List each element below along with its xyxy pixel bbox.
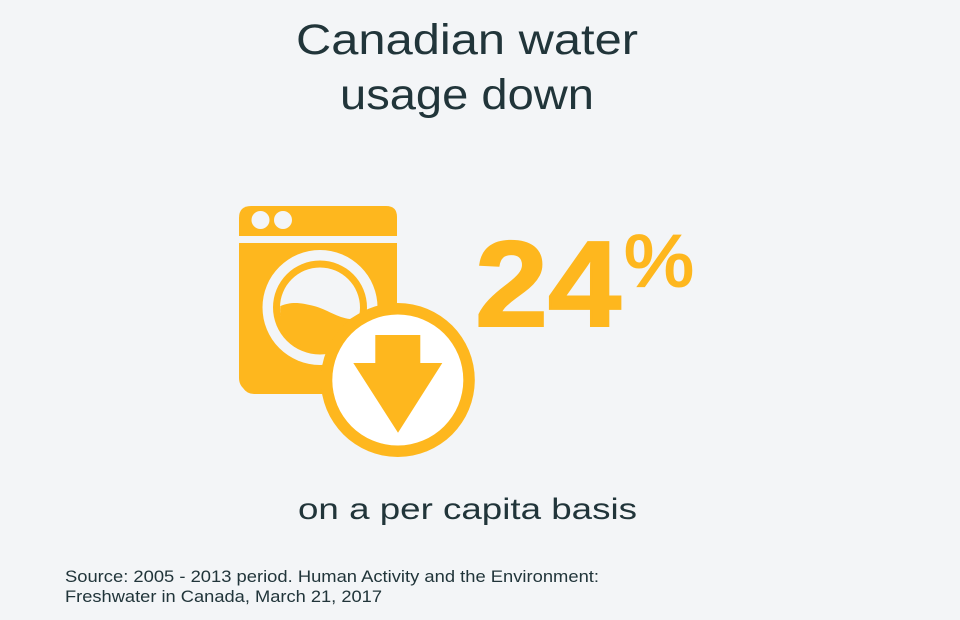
statistic: 24%: %: [624, 221, 694, 302]
statistic: 24%: [475, 216, 694, 352]
source note: Freshwater in Canada, March 21, 2017: [65, 588, 382, 606]
statistic: 24%: 24: [475, 216, 621, 352]
down arrow badge: [321, 303, 475, 457]
title: [296, 16, 638, 119]
source note: [65, 568, 599, 606]
subtitle: on a per capita basis: [298, 493, 637, 526]
washing machine control panel: [239, 206, 397, 236]
washing machine body: [239, 243, 397, 394]
title: usage down: [340, 71, 594, 119]
source note: Source: 2005 - 2013 period. Human Activity and the Environment:: [65, 568, 599, 586]
icon: washing machine with down arrow: [239, 206, 475, 457]
title: Canadian water: [296, 16, 638, 64]
